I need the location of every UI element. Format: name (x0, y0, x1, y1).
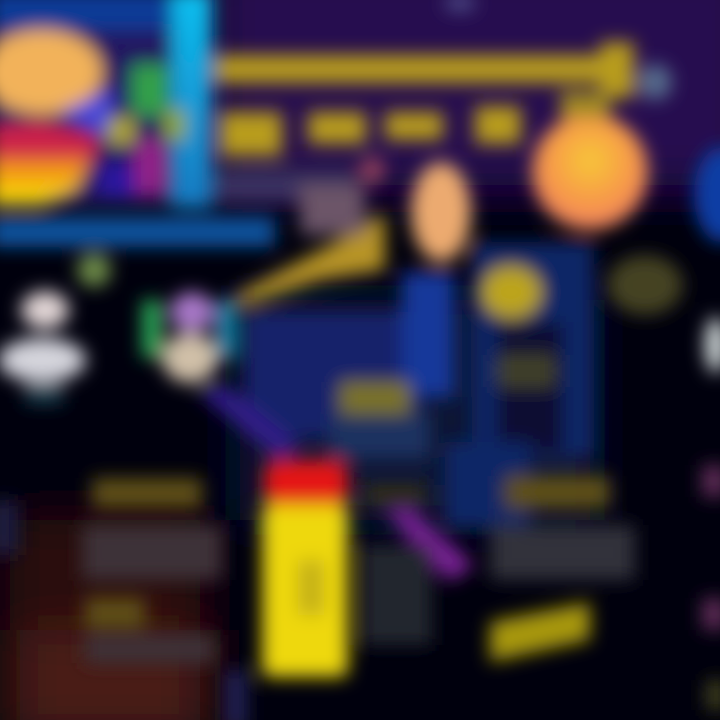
text block: right body one (490, 525, 635, 580)
icon: rainbow lips (0, 88, 165, 205)
text block: left heading two (85, 598, 145, 628)
icon: left side dim element (0, 500, 18, 555)
arrow: yellow diagonal (235, 156, 385, 306)
text block: left heading one (92, 478, 202, 508)
panel: top-left blue header (0, 0, 275, 247)
icon: right edge blue circle (694, 147, 720, 243)
panel: center blue chart (245, 272, 454, 458)
icon: right edge white figure (705, 317, 720, 373)
icon: center-left figure (142, 292, 236, 383)
icon: colored blocks (108, 65, 185, 144)
panel: right blue column (445, 242, 594, 527)
panel: yellow warning tube (262, 460, 348, 677)
icon: top pale spot (444, 0, 476, 11)
icon: top-right pale spot (638, 64, 672, 100)
subtitle (215, 170, 355, 202)
arrow: purple diagonal right (385, 508, 475, 582)
icons: right edge dots (702, 465, 720, 710)
arrow: purple diagonal left (195, 385, 300, 460)
icon: left white figure (0, 253, 111, 403)
text block: center column (362, 485, 432, 645)
icon: large orange circle (532, 92, 648, 230)
text block: right highlighted (490, 602, 590, 662)
icon: orange circle (0, 30, 102, 114)
text block: left body one (82, 525, 222, 580)
icon: lower stripe (225, 670, 247, 720)
icon: olive badge (607, 255, 683, 315)
text block: left body two (85, 635, 215, 663)
icon: orange ellipse (411, 162, 471, 262)
title (215, 42, 634, 156)
text block: right heading one (505, 476, 610, 508)
